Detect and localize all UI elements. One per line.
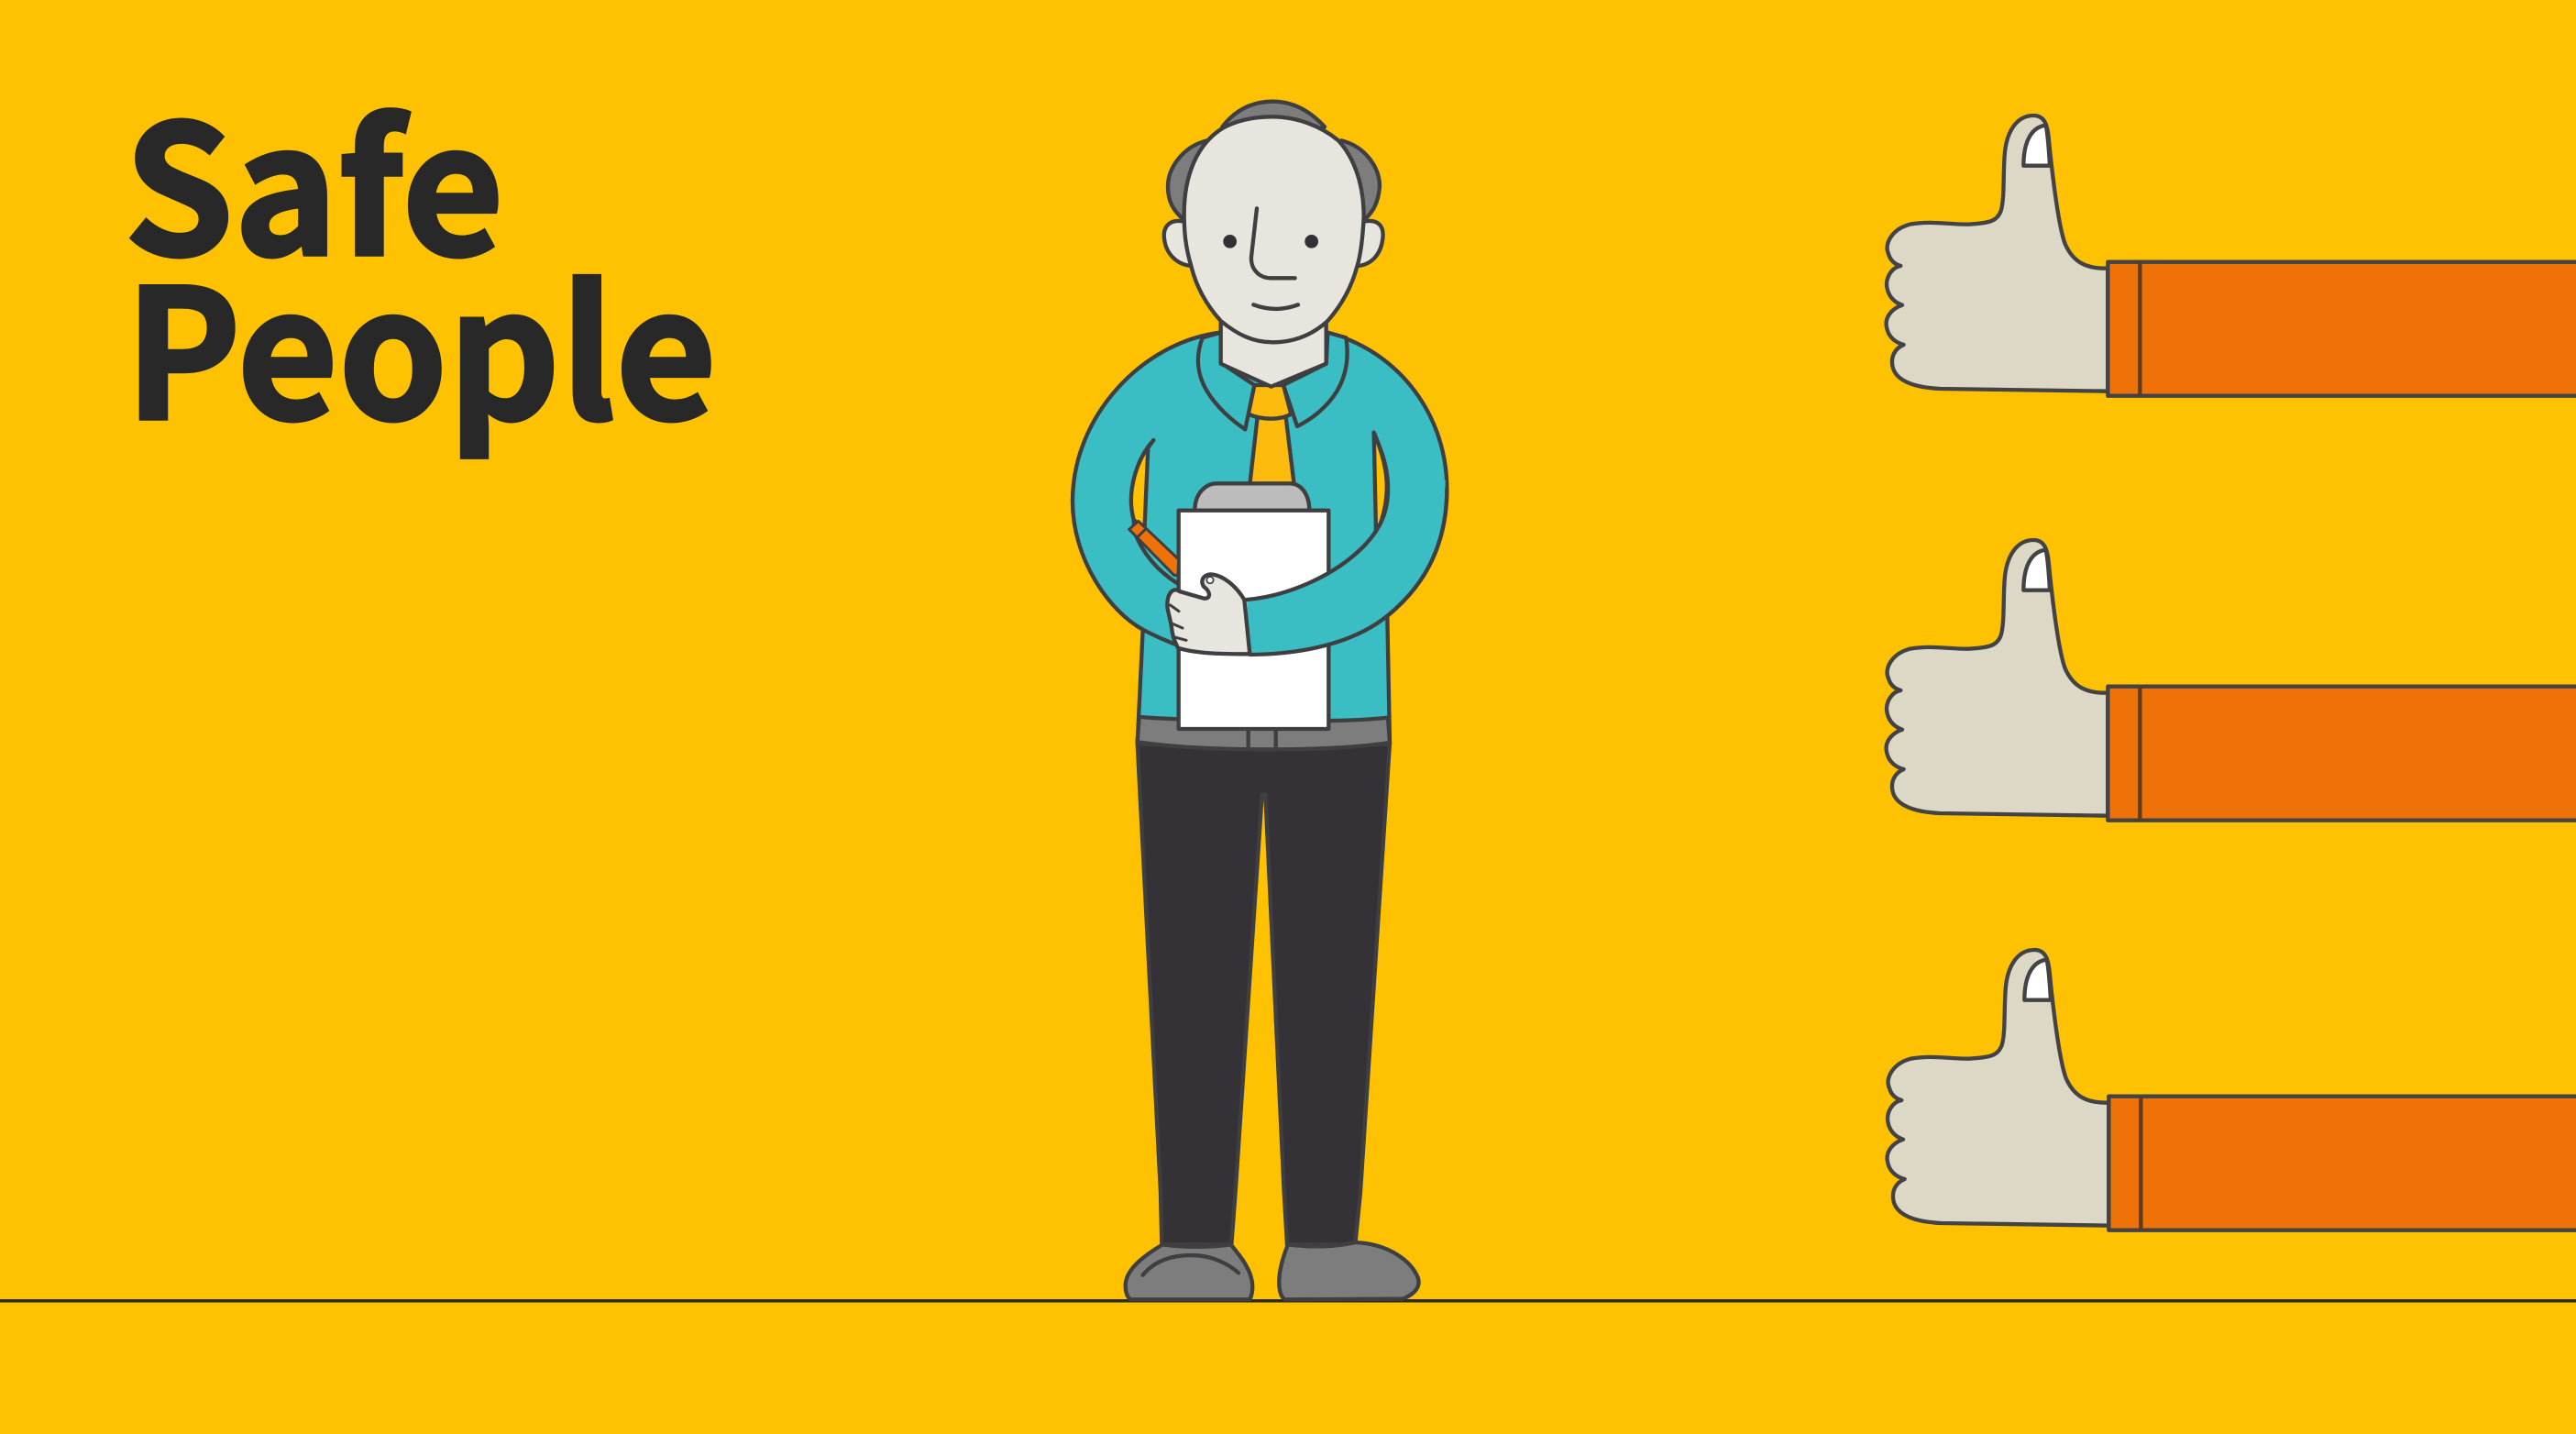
thumbs up 2 [1887,540,2576,821]
left shoe [1126,1244,1252,1299]
neck [1221,314,1327,387]
right arm across clipboard [1247,433,1447,655]
clipboard [1179,483,1328,729]
left arm inner edge [1134,520,1178,584]
left sleeve lower edge [1143,630,1178,645]
title [124,48,717,471]
hand holding pencil [1167,574,1249,654]
face [1223,208,1318,309]
shirt and sleeves silhouette [1073,333,1447,745]
tie [1249,385,1294,484]
title: People [125,212,717,471]
hair [1168,102,1380,220]
head [1184,116,1364,342]
right shoe [1279,1242,1419,1299]
pencil [1129,521,1179,575]
ground line [0,1299,2576,1302]
ears [1164,221,1383,266]
trousers [1138,743,1390,1244]
left arm gap [1131,440,1153,532]
title: Safe [124,48,504,307]
person with clipboard [1073,102,1447,1299]
belt [1138,717,1390,749]
right arm gap [1374,433,1387,532]
thumbs up 1 [1887,116,2576,396]
collar [1198,333,1348,429]
thumbs up 3 [1888,950,2576,1230]
